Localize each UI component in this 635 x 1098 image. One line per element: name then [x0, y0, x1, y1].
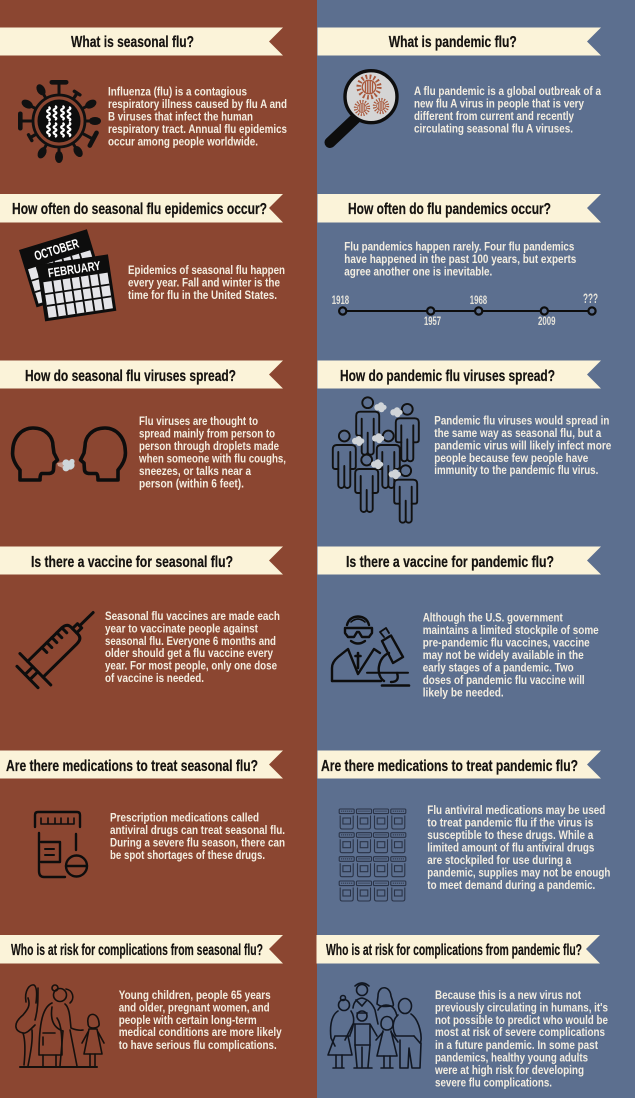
text: epidemics frequency: time for flu in the United States.	[128, 288, 277, 302]
icon: magnifying glass with viruses	[330, 71, 397, 142]
banner: seasonal vaccine: Is there a vaccine for seasonal flu?	[31, 554, 233, 571]
text: seasonal vaccine: year to vaccinate people against	[105, 622, 258, 636]
text: seasonal antivirals	[110, 811, 285, 862]
text: pandemic antivirals: to treat pandemic flu if the virus is	[427, 816, 594, 830]
text: how seasonal flu spreads: when someone with flu coughs,	[138, 452, 286, 466]
text: pandemic vaccine: pre-pandemic flu vaccines, vaccine	[423, 636, 590, 650]
text: influenza definition: Influenza (flu) is a contagious	[108, 84, 247, 98]
text: pandemic definition: different from current and recently	[414, 109, 574, 123]
icon: calendars: FEBRUARY	[47, 259, 102, 280]
text: pandemic vaccine: maintains a limited stockpile of some	[423, 623, 599, 637]
text: pandemic antivirals: susceptible to these drugs. While a	[427, 828, 594, 842]
banner: seasonal medications: Are there medications to treat seasonal flu?	[6, 758, 258, 775]
text: pandemic antivirals: limited amount of flu antiviral drugs	[427, 840, 595, 854]
text: influenza definition: occur among people worldwide.	[108, 134, 258, 148]
text: influenza definition: respiratory illness caused by flu A and	[108, 97, 287, 111]
banner: how pandemic flu spreads	[318, 360, 601, 388]
icon: pregnant woman, elder and child	[16, 985, 104, 1067]
text: how pandemic flu spreads: the same way as seasonal flu, but a	[434, 426, 602, 440]
text: how seasonal flu spreads	[138, 414, 286, 490]
text: seasonal vaccine: seasonal flu. Everyone 6 months and	[105, 634, 276, 648]
icon: virus	[18, 80, 101, 163]
text: seasonal vaccine	[105, 609, 280, 685]
text: seasonal risk groups: people with certain long-term	[119, 1013, 257, 1027]
text: seasonal antivirals: Prescription medications called	[110, 811, 259, 825]
text: pandemic frequency: have happened in the past 100 years, but experts	[344, 252, 577, 266]
chart: pandemic timeline: ???	[583, 290, 598, 306]
text: seasonal risk groups: medical conditions are more likely	[119, 1025, 282, 1039]
text: seasonal antivirals: During a severe flu season, there can	[110, 836, 285, 850]
text: epidemics frequency: every year. Fall and winter is the	[128, 276, 280, 290]
banner: what is seasonal flu: What is seasonal flu?	[71, 34, 194, 51]
text: how seasonal flu spreads: person through droplets made	[139, 439, 279, 453]
text: epidemics frequency	[128, 263, 285, 302]
text: seasonal risk groups: to have serious flu complications.	[119, 1038, 277, 1052]
text: seasonal risk groups: Young children, people 65 years	[119, 988, 271, 1002]
icon: calendars	[19, 229, 116, 321]
banner: seasonal medications	[0, 750, 283, 778]
banner: pandemic vaccine	[318, 546, 601, 574]
text: how pandemic flu spreads: people because few people have	[434, 451, 589, 465]
icon: scientist with microscope	[332, 616, 409, 686]
text: seasonal risk groups	[119, 988, 282, 1052]
text: pandemic vaccine	[423, 611, 599, 700]
icon: crowd of people with droplets	[333, 397, 419, 523]
banner: how seasonal flu spreads	[0, 360, 283, 388]
banner: how often seasonal epidemics	[0, 194, 283, 222]
banner: how often pandemics: How often do flu pandemics occur?	[348, 201, 551, 218]
text: pandemic risk groups: Because this is a new virus not	[435, 988, 581, 1002]
text: pandemic risk groups	[434, 988, 608, 1090]
icon: syringe	[12, 597, 109, 693]
icon: calendars: OCTOBER	[32, 235, 81, 263]
text: pandemic definition: new flu A virus in people that is very	[414, 96, 584, 110]
text: seasonal vaccine: older should get a flu vaccine every	[105, 646, 273, 660]
banner: seasonal risk	[0, 935, 283, 964]
banner: how often seasonal epidemics: How often do seasonal flu epidemics occur?	[12, 201, 267, 218]
text: how seasonal flu spreads: person (within 6 feet).	[139, 476, 244, 490]
text: how pandemic flu spreads	[434, 413, 612, 477]
icon: two heads with droplets	[13, 428, 125, 480]
text: pandemic antivirals	[427, 803, 610, 892]
banner: pandemic vaccine: Is there a vaccine for pandemic flu?	[346, 554, 554, 571]
text: seasonal risk groups: and older, pregnant women, and	[119, 1000, 270, 1014]
text: pandemic definition	[414, 84, 601, 136]
text: pandemic vaccine: early stages of a pandemic. Two	[423, 660, 574, 674]
text: seasonal vaccine: of vaccine is needed.	[105, 671, 204, 685]
text: pandemic risk groups: in a future pandemic. In some past	[435, 1038, 598, 1052]
icon: stockpile of pill bottles	[339, 809, 406, 901]
text: pandemic risk groups: pandemics, healthy young adults	[435, 1050, 588, 1064]
chart: pandemic timeline: 1968	[470, 295, 488, 307]
banner: pandemic medications	[318, 750, 601, 778]
text: pandemic risk groups: were at high risk for developing	[434, 1063, 584, 1077]
text: seasonal vaccine: year. For most people, only one dose	[105, 658, 277, 672]
banner: seasonal vaccine	[0, 546, 283, 574]
text: seasonal antivirals: be spot shortages of these drugs.	[110, 848, 265, 862]
banner: how often pandemics	[318, 194, 601, 222]
text: pandemic antivirals: are stockpiled for use during a	[427, 853, 572, 867]
text: pandemic antivirals: to meet demand during a pandemic.	[427, 878, 595, 892]
text: pandemic risk groups: severe flu complications.	[435, 1076, 552, 1090]
text: how seasonal flu spreads: spread mainly from person to	[139, 426, 275, 440]
banner: what is pandemic flu	[318, 28, 601, 56]
banner: how seasonal flu spreads: How do seasonal flu viruses spread?	[25, 368, 236, 385]
banner: what is pandemic flu: What is pandemic flu?	[389, 34, 517, 51]
chart: pandemic timeline	[332, 290, 598, 328]
chart: pandemic timeline: 2009	[538, 316, 556, 328]
panel: pandemic flu	[316, 0, 635, 1098]
text: pandemic vaccine: Although the U.S. government	[423, 611, 563, 625]
text: pandemic definition: circulating seasonal flu A viruses.	[414, 122, 573, 136]
text: influenza definition: B viruses that infect the human	[108, 110, 253, 124]
chart: pandemic timeline: 1957	[424, 316, 441, 328]
text: pandemic frequency: agree another one is inevitable.	[344, 264, 492, 278]
banner: how pandemic flu spreads: How do pandemic flu viruses spread?	[340, 368, 555, 385]
text: pandemic definition: A flu pandemic is a global outbreak of a	[414, 84, 601, 98]
text: pandemic vaccine: may not be widely available in the	[423, 648, 584, 662]
text: epidemics frequency: Epidemics of seasonal flu happen	[128, 263, 285, 277]
text: influenza definition: respiratory tract. Annual flu epidemics	[108, 122, 287, 136]
banner: seasonal risk: Who is at risk for complications from seasonal flu?	[11, 942, 263, 959]
text: pandemic frequency	[344, 240, 577, 278]
text: how pandemic flu spreads: immunity to the pandemic flu virus.	[434, 463, 598, 477]
banner: what is seasonal flu	[0, 28, 283, 56]
text: pandemic vaccine: doses of pandemic flu vaccine will	[423, 673, 585, 687]
text: influenza definition	[108, 84, 287, 148]
text: how seasonal flu spreads: Flu viruses are thought to	[139, 414, 258, 428]
icon: family group	[328, 983, 421, 1068]
icon: pill bottle	[35, 812, 87, 877]
text: pandemic vaccine: likely be needed.	[423, 686, 504, 700]
banner: pandemic risk	[316, 935, 600, 964]
chart: pandemic timeline: 1918	[332, 295, 350, 307]
text: seasonal vaccine: Seasonal flu vaccines are made each	[105, 609, 280, 623]
text: pandemic frequency: Flu pandemics happen rarely. Four flu pandemics	[344, 240, 575, 254]
text: seasonal antivirals: antiviral drugs can treat seasonal flu.	[110, 823, 285, 837]
text: how seasonal flu spreads: sneezes, or talks near a	[139, 464, 251, 478]
panel: seasonal flu	[0, 0, 317, 1098]
